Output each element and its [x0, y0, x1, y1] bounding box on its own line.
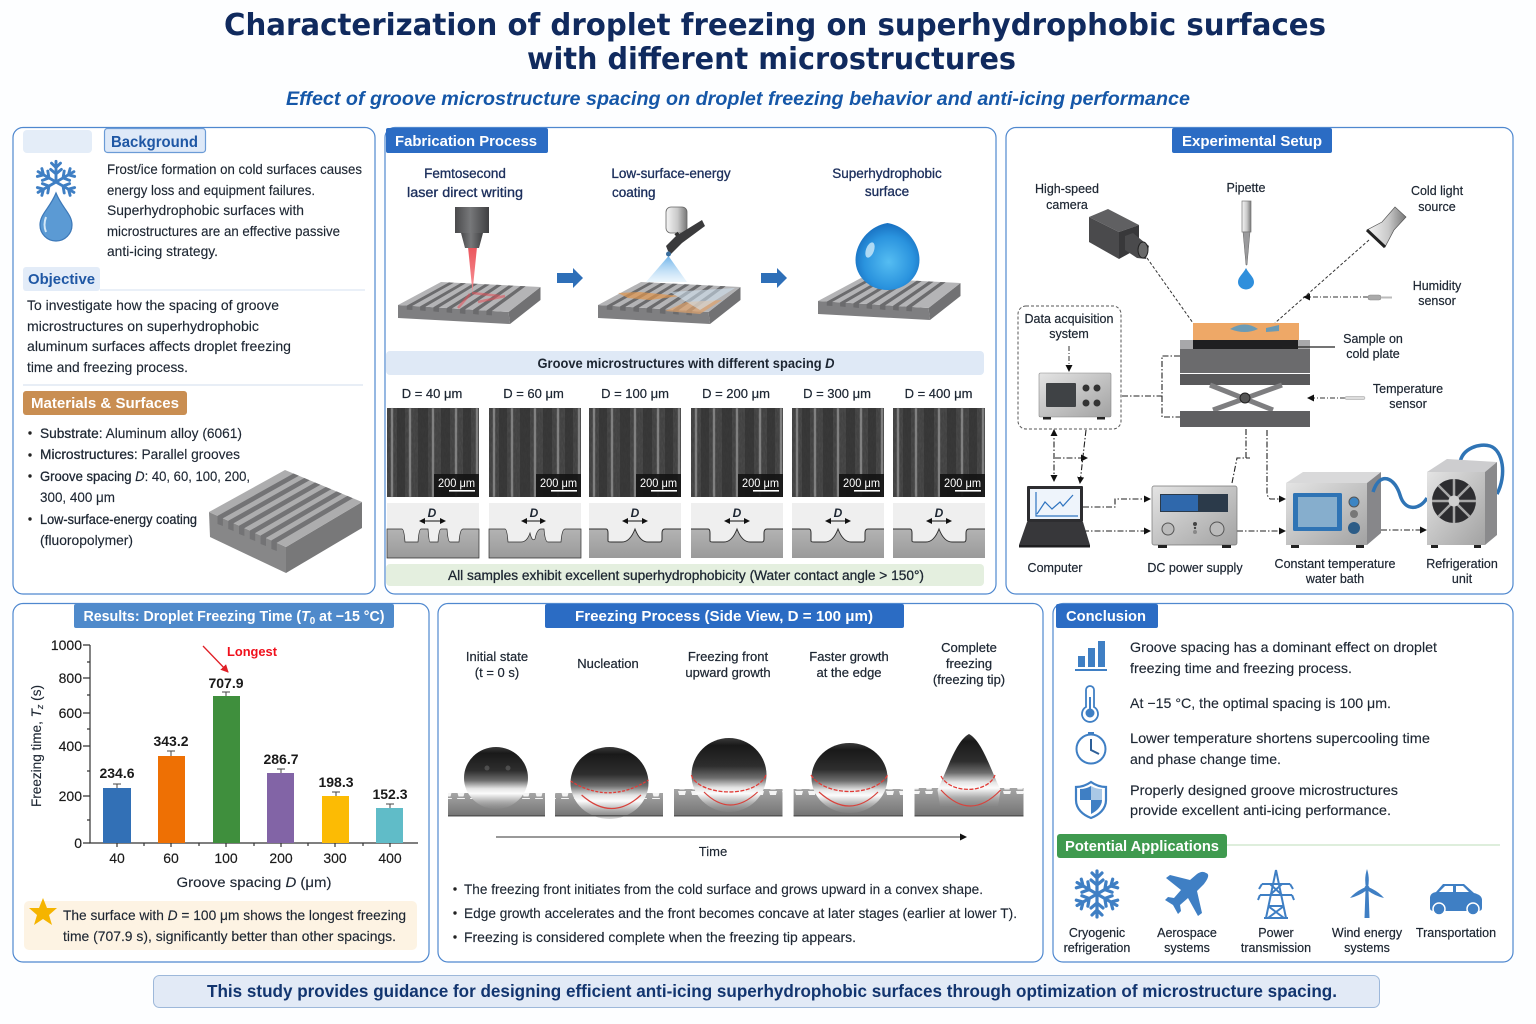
callout: longest freezing time [203, 644, 278, 672]
stage: freezing front upward growth: upward growth [685, 665, 771, 680]
subtitle: Effect of groove microstructure spacing on droplet freezing behavior and anti-icing performance [286, 89, 1190, 110]
step 1: femtosecond laser direct writing: laser direct writing [407, 185, 523, 200]
text: conclusion 1 [1130, 639, 1437, 676]
sample column: D = 40 µm [387, 386, 479, 558]
band: contact angle note [386, 564, 984, 586]
icon: high-speed camera [1035, 182, 1149, 259]
stage: complete freezing tip: (freezing tip) [933, 672, 1005, 687]
sample column: D = 300 µm [792, 386, 884, 558]
arrow: step 2 to step 3 [761, 268, 787, 288]
text: background [107, 161, 362, 259]
bar chart: freezing time by groove spacing: 400 [378, 850, 402, 866]
heading: potential applications: Potential Applications [1065, 838, 1219, 855]
icon: pipette: Pipette [1227, 181, 1266, 195]
text: background: Superhydrophobic surfaces with [107, 202, 304, 218]
callout: longest freezing time: Longest [227, 644, 278, 659]
bar: 300 µm [318, 774, 354, 843]
heading: experimental setup: Experimental Setup [1182, 133, 1322, 150]
icon: cold light source: source [1418, 200, 1456, 214]
text: conclusion 3: Lower temperature shortens supercooling time [1130, 730, 1430, 746]
list: materials [28, 425, 250, 548]
step 3: superhydrophobic surface: surface [865, 184, 909, 199]
step 1: femtosecond laser direct writing: Femtosecond [424, 166, 506, 181]
footer banner [154, 976, 1380, 1008]
text: objective: microstructures on superhydrophobic [27, 318, 259, 334]
step 2: low-surface-energy coating: coating [612, 185, 656, 200]
sample column: D = 200 µm [691, 386, 783, 558]
text: objective [27, 297, 291, 375]
heading: objective [23, 267, 100, 291]
text: conclusion 4: Properly designed groove microstructures [1130, 782, 1398, 798]
heading: results: 0 [310, 616, 316, 627]
stage: nucleation: Nucleation [577, 656, 639, 671]
heading: fabrication process: Fabrication Process [395, 133, 537, 150]
step 1: femtosecond laser direct writing [398, 166, 540, 324]
bar chart: freezing time by groove spacing: Freezing time, T [29, 709, 44, 807]
application: transportation [1416, 884, 1496, 940]
sample column: D = 60 µm [489, 386, 581, 558]
heading: results [74, 604, 394, 628]
bar: 40 µm: 234.6 [99, 765, 135, 781]
stage: faster growth at the edge: Faster growth [809, 649, 889, 664]
title: with different microstructures [527, 42, 1016, 77]
heading: conclusion: Conclusion [1066, 608, 1146, 625]
panel: fabrication process [385, 128, 996, 594]
text: conclusion 1: Groove spacing has a dominant effect on droplet [1130, 639, 1437, 655]
title: Characterization of droplet freezing on superhydrophobic surfaces [224, 8, 1326, 43]
connection lines [1054, 240, 1426, 531]
bar: 200 µm: 286.7 [263, 751, 299, 767]
callout: result note with star: The surface with D = 100 μm shows the longest freezing [63, 907, 406, 923]
application: aerospace systems [1157, 872, 1217, 955]
text: data acquisition system box [1018, 306, 1121, 429]
bar: 100 µm: 707.9 [208, 675, 244, 691]
list: materials: Groove spacing D: 40, 60, 100, 200, [40, 468, 250, 484]
icon: pipette [1227, 181, 1266, 290]
icon: coolant hoses [1373, 445, 1503, 507]
text: background: Frost/ice formation on cold surfaces causes [107, 161, 362, 177]
illustration: sample on cold plate with lift [1180, 323, 1403, 427]
sample column: D = 300 µm: D = 300 μm [803, 386, 871, 401]
stage: initial state: Initial state [466, 649, 528, 664]
bar chart: freezing time by groove spacing: 200 [269, 850, 293, 866]
application: wind energy systems [1332, 869, 1403, 955]
step 3: superhydrophobic surface [818, 166, 960, 320]
application: wind energy systems: Wind energy [1332, 926, 1403, 940]
text: conclusion 3: and phase change time. [1130, 751, 1281, 767]
list: materials: Microstructures: Parallel grooves [40, 446, 240, 462]
sample column: D = 100 µm [589, 386, 681, 558]
icon: bar chart [1075, 641, 1107, 671]
text: objective: time and freezing process. [27, 359, 188, 375]
bar: 60 µm: 343.2 [153, 733, 189, 749]
heading: objective: Objective [28, 271, 95, 288]
icon: temperature sensor [1345, 382, 1443, 411]
illustration: grooved sample block [209, 470, 362, 573]
sample column: D = 60 µm: D [530, 506, 539, 520]
panel: freezing process [438, 604, 1043, 962]
application: wind energy systems: systems [1344, 941, 1390, 955]
list: freezing observations: Edge growth accelerates and the front becomes concave at later stages (earlier at lower T). [464, 905, 1017, 921]
bar chart: freezing time by groove spacing: 800 [59, 670, 82, 686]
heading: materials and surfaces: Materials & Surfaces [31, 395, 179, 412]
text: objective: aluminum surfaces affects droplet freezing [27, 338, 291, 354]
icon: shield [1076, 782, 1106, 818]
icon: thermometer [1082, 686, 1098, 722]
stage: freezing front upward growth: Freezing front [688, 649, 768, 664]
bar chart: freezing time by groove spacing: 200 [59, 788, 82, 804]
icon: DC power supply [1147, 486, 1243, 575]
list: materials: Substrate: Aluminum alloy (6061) [40, 425, 242, 441]
title [224, 8, 1326, 77]
stage: complete freezing tip: freezing [946, 656, 992, 671]
icon: refrigeration unit: Refrigeration [1426, 557, 1498, 571]
heading: materials and surfaces [23, 391, 187, 415]
icon: constant temperature water bath: water bath [1305, 572, 1364, 586]
bar chart: freezing time by groove spacing: 40 [109, 850, 125, 866]
icon: high-speed camera: camera [1046, 198, 1088, 212]
text: data acquisition system box: Data acquisition [1025, 312, 1114, 326]
icon: computer [1019, 486, 1090, 575]
list: materials: 300, 400 μm [40, 489, 115, 505]
bar chart: freezing time by groove spacing: Groove spacing D (μm) [176, 875, 332, 890]
callout: result note with star: time (707.9 s), significantly better than other spacings. [63, 928, 396, 944]
bar chart: freezing time by groove spacing: 1000 [51, 637, 82, 653]
icon: refrigeration unit [1426, 459, 1498, 586]
text: objective: To investigate how the spacing of groove [27, 297, 279, 313]
panel: experimental setup [1006, 128, 1513, 594]
sample column: D = 400 µm: D = 400 μm [905, 386, 972, 401]
bar chart: freezing time by groove spacing: 60 [163, 850, 179, 866]
heading: conclusion [1056, 604, 1158, 628]
icon: refrigeration unit: unit [1452, 572, 1473, 586]
heading: background [104, 128, 206, 152]
bar chart: freezing time by groove spacing: 300 [323, 850, 347, 866]
panel: background, objective, materials [13, 128, 375, 594]
application: cryogenic refrigeration [1064, 871, 1130, 955]
blank header chip [23, 130, 92, 153]
bar chart: freezing time by groove spacing: 100 [214, 850, 238, 866]
bar chart: freezing time by groove spacing: (s) [29, 685, 44, 705]
bar chart: freezing time by groove spacing: 0 [74, 835, 82, 851]
sample column: D = 100 µm: D = 100 μm [601, 386, 669, 401]
band: contact angle note: All samples exhibit excellent superhydrophobicity (Water contact angle > 150°) [448, 568, 924, 583]
icon: temperature sensor: sensor [1389, 397, 1427, 411]
step 3: superhydrophobic surface: Superhydrophobic [832, 166, 942, 181]
text: background: energy loss and equipment failures. [107, 182, 315, 198]
text: conclusion 2: At −15 °C, the optimal spacing is 100 μm. [1130, 695, 1391, 711]
stage: initial state: (t = 0 s) [475, 665, 519, 680]
bar: 100 µm [208, 675, 244, 843]
application: power transmission: Power [1258, 926, 1294, 940]
bar chart: freezing time by groove spacing: 400 [59, 738, 82, 754]
stage: freezing front upward growth [674, 649, 782, 816]
icon: snowflake and water drop [35, 161, 77, 241]
heading: fabrication process [386, 128, 548, 153]
sample column: D = 40 µm: D = 40 μm [402, 386, 462, 401]
icon: cold light source: Cold light [1411, 184, 1464, 198]
stage: initial state [448, 649, 545, 816]
bar: 400 µm: 152.3 [372, 786, 408, 802]
text: conclusion 3 [1130, 730, 1430, 767]
sample column: D = 400 µm [893, 386, 985, 558]
callout: result note with star [24, 898, 417, 950]
bar: 200 µm [263, 751, 299, 843]
list: materials: Low-surface-energy coating [40, 511, 197, 527]
heading: experimental setup [1172, 128, 1332, 153]
heading: results: Results: Droplet Freezing Time (T [84, 609, 310, 625]
icon: acquisition device [1039, 373, 1111, 420]
arrow: step 1 to step 2 [557, 268, 583, 288]
arrow: time axis: Time [699, 844, 727, 859]
icon: humidity sensor [1368, 279, 1462, 308]
heading: potential applications [1057, 834, 1227, 858]
heading: freezing process: Freezing Process (Side View, D = 100 μm) [575, 608, 873, 625]
application: aerospace systems: systems [1164, 941, 1210, 955]
icon: cold light source [1367, 184, 1464, 247]
bar: 60 µm [153, 733, 189, 843]
stage: complete freezing tip: Complete [941, 640, 997, 655]
icon: clock [1076, 732, 1106, 764]
list: freezing observations: Freezing is considered complete when the freezing tip appears. [464, 929, 856, 945]
panel: results droplet freezing time [13, 604, 429, 962]
step 2: low-surface-energy coating: Low-surface-energy [611, 166, 731, 181]
icon: DC power supply: DC power supply [1147, 561, 1243, 575]
illustration: sample on cold plate with lift: cold plate [1346, 347, 1400, 361]
bar: 400 µm [372, 786, 408, 843]
stage: nucleation [555, 656, 663, 819]
bar chart: freezing time by groove spacing: z [35, 704, 45, 710]
band: groove microstructures heading [386, 351, 984, 375]
text: conclusion 1: freezing time and freezing process. [1130, 660, 1352, 676]
application: transportation: Transportation [1416, 926, 1496, 940]
bar chart: freezing time by groove spacing: 600 [59, 705, 82, 721]
icon: high-speed camera: High-speed [1035, 182, 1099, 196]
sample column: D = 40 µm: D [428, 506, 437, 520]
icon: computer: Computer [1028, 561, 1082, 575]
stage: faster growth at the edge: at the edge [816, 665, 882, 680]
heading: freezing process [545, 604, 904, 628]
list: materials: (fluoropolymer) [40, 532, 133, 548]
heading: results: at −15 °C) [315, 609, 385, 625]
list: freezing observations [453, 881, 1017, 945]
bar: 300 µm: 198.3 [318, 774, 354, 790]
step 2: low-surface-energy coating [598, 166, 740, 324]
icon: humidity sensor: Humidity [1413, 279, 1462, 293]
text: data acquisition system box: system [1049, 327, 1089, 341]
application: cryogenic refrigeration: refrigeration [1064, 941, 1130, 955]
application: power transmission: transmission [1241, 941, 1311, 955]
stage: complete freezing tip [914, 640, 1024, 816]
text: background: anti-icing strategy. [107, 243, 218, 259]
icon: temperature sensor: Temperature [1373, 382, 1443, 396]
list: freezing observations: The freezing front initiates from the cold surface and grows upward in a convex shape. [464, 881, 983, 897]
illustration: sample on cold plate with lift: Sample on [1343, 332, 1403, 346]
application: aerospace systems: Aerospace [1157, 926, 1217, 940]
text: conclusion 4: provide excellent anti-icing performance. [1130, 802, 1391, 818]
heading: background: Background [111, 134, 198, 151]
icon: humidity sensor: sensor [1418, 294, 1456, 308]
sample column: D = 200 µm: D = 200 μm [702, 386, 770, 401]
application: power transmission [1241, 870, 1311, 955]
stage: faster growth at the edge [794, 649, 903, 816]
icon: constant temperature water bath [1275, 472, 1395, 586]
icon: constant temperature water bath: Constant temperature [1275, 557, 1395, 571]
text: background: microstructures are an effective passive [107, 223, 340, 239]
application: cryogenic refrigeration: Cryogenic [1069, 926, 1125, 940]
panel: conclusion and applications [1053, 604, 1513, 962]
band: groove microstructures heading: Groove microstructures with different spacing D [538, 356, 835, 371]
sample column: D = 60 µm: D = 60 μm [503, 386, 564, 401]
text: conclusion 4 [1130, 782, 1398, 818]
bar chart: freezing time by groove spacing [29, 637, 418, 890]
footer banner: This study provides guidance for designing efficient anti-icing superhydrophobic surfaces through optimization of microstructure spacing. [207, 981, 1337, 1001]
bar: 40 µm [99, 765, 135, 843]
